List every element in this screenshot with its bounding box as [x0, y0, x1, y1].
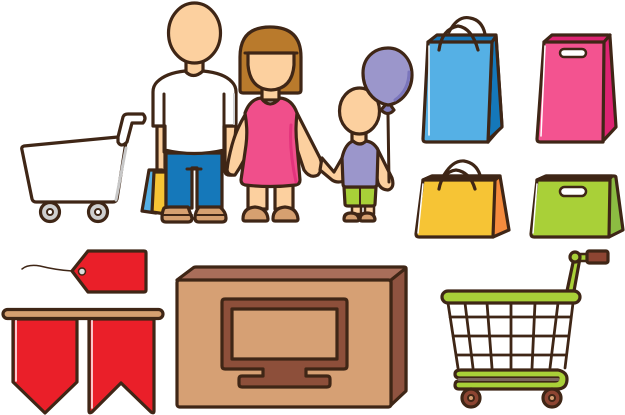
icon: pink bag — [537, 35, 616, 142]
banner: flags — [3, 310, 163, 413]
figure: woman — [227, 27, 322, 221]
icon: boxed television — [177, 267, 406, 407]
icon: small shopping bags — [142, 170, 166, 214]
icon: monitor — [222, 299, 347, 387]
icon: green bag — [531, 176, 623, 237]
icon: white shopping cart — [22, 114, 145, 222]
icon: blue bag — [423, 18, 502, 142]
figure: man — [142, 3, 236, 222]
icon: yellow bag — [416, 161, 509, 237]
icon: price tag — [22, 251, 146, 292]
figure: boy with balloon — [320, 48, 412, 221]
icon: green shopping cart — [442, 251, 608, 407]
